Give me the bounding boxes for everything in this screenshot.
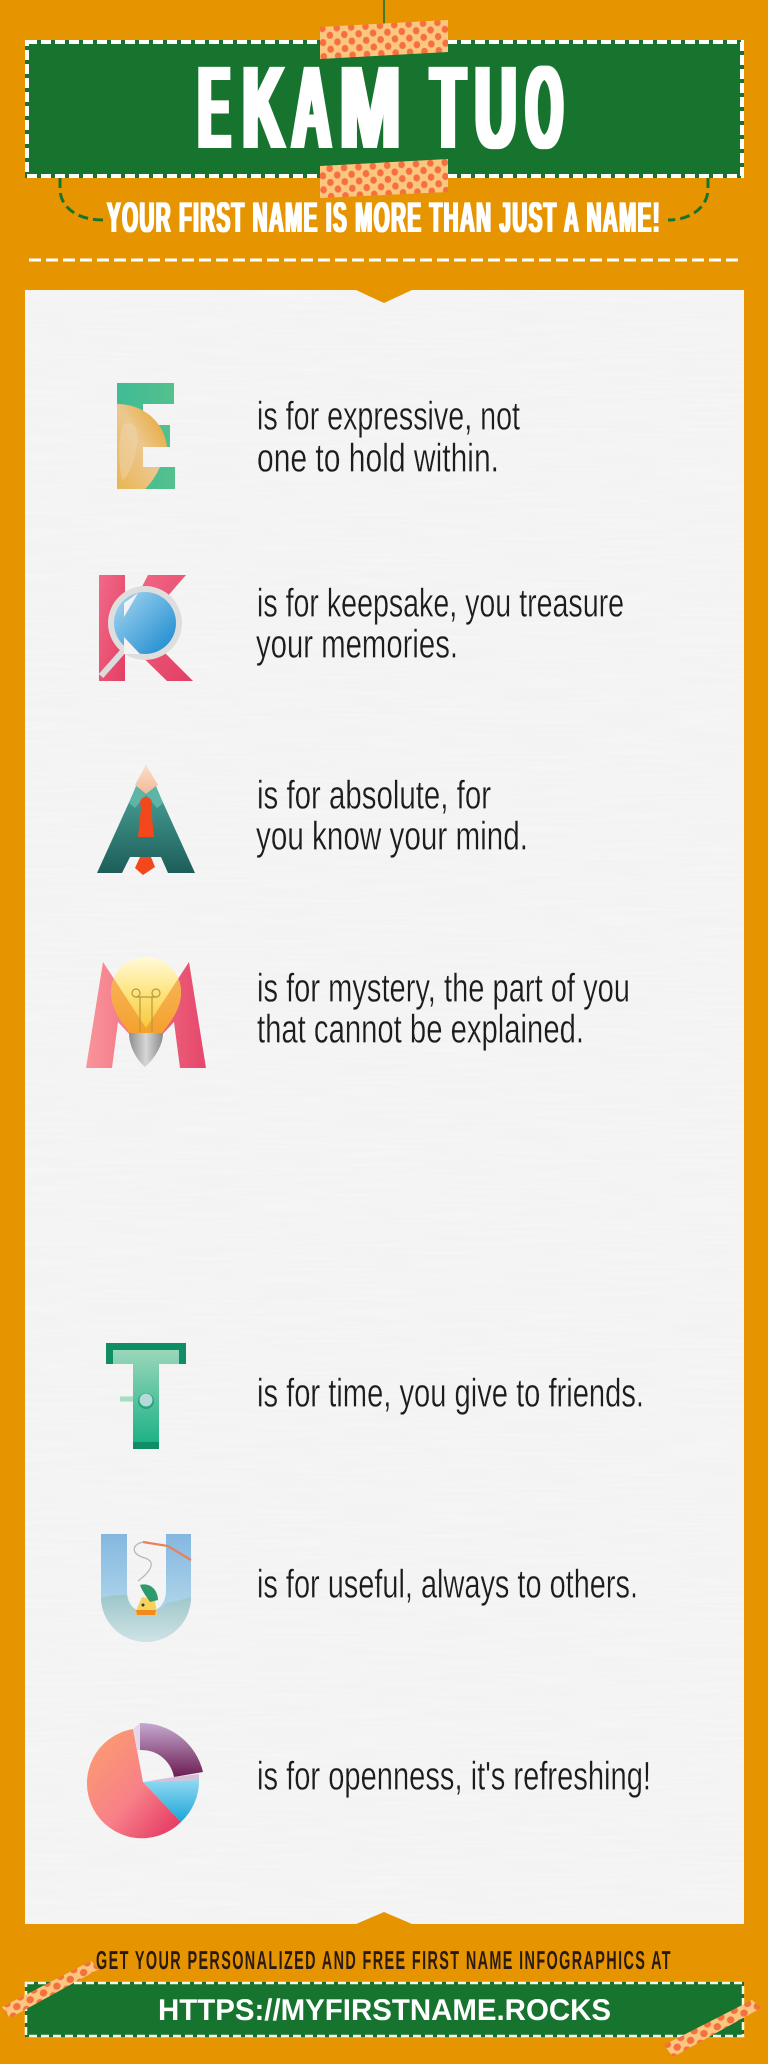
text: M line (257, 966, 630, 1052)
icon: letter E (117, 383, 175, 489)
title: T (431, 42, 465, 174)
title: K (243, 42, 284, 174)
text: M line: that cannot be explained. (257, 1008, 584, 1052)
title banner (25, 40, 744, 178)
icon: letter U (101, 1534, 191, 1642)
panel: white paper content (25, 290, 744, 1924)
icon: letter A (97, 765, 195, 875)
dashed connector: right (668, 178, 708, 220)
tape: footer right (664, 2000, 761, 2057)
title banner: O (526, 42, 563, 174)
icon: letter O pie (87, 1723, 203, 1838)
title: E (198, 42, 230, 174)
tape: footer left (2, 1961, 99, 2018)
title: A (292, 42, 331, 174)
dashed connector: left (60, 178, 103, 220)
icon: letter K (99, 575, 193, 681)
footer banner (25, 1982, 744, 2037)
tape: bottom (320, 159, 448, 198)
text: M line: is for mystery, the part of you (257, 966, 630, 1010)
text: K line (256, 582, 624, 666)
title: U (475, 42, 516, 174)
title: M (340, 42, 400, 174)
hanging thread (383, 0, 385, 26)
icon: letter M (86, 957, 206, 1068)
text: K line: is for keepsake, you treasure (257, 582, 624, 626)
text: E line: one to hold within. (257, 436, 499, 480)
text: E line: is for expressive, not (257, 394, 520, 438)
tape: top (320, 20, 448, 59)
text: A line (256, 774, 528, 858)
footer URL: HTTPS://MYFIRSTNAME.ROCKS (158, 1994, 611, 2027)
text: A line: is for absolute, for (257, 774, 491, 818)
text: A line: you know your mind. (256, 814, 528, 858)
icon: letter T (106, 1343, 186, 1449)
text: K line: your memories. (256, 622, 458, 666)
text: E line (257, 394, 520, 480)
